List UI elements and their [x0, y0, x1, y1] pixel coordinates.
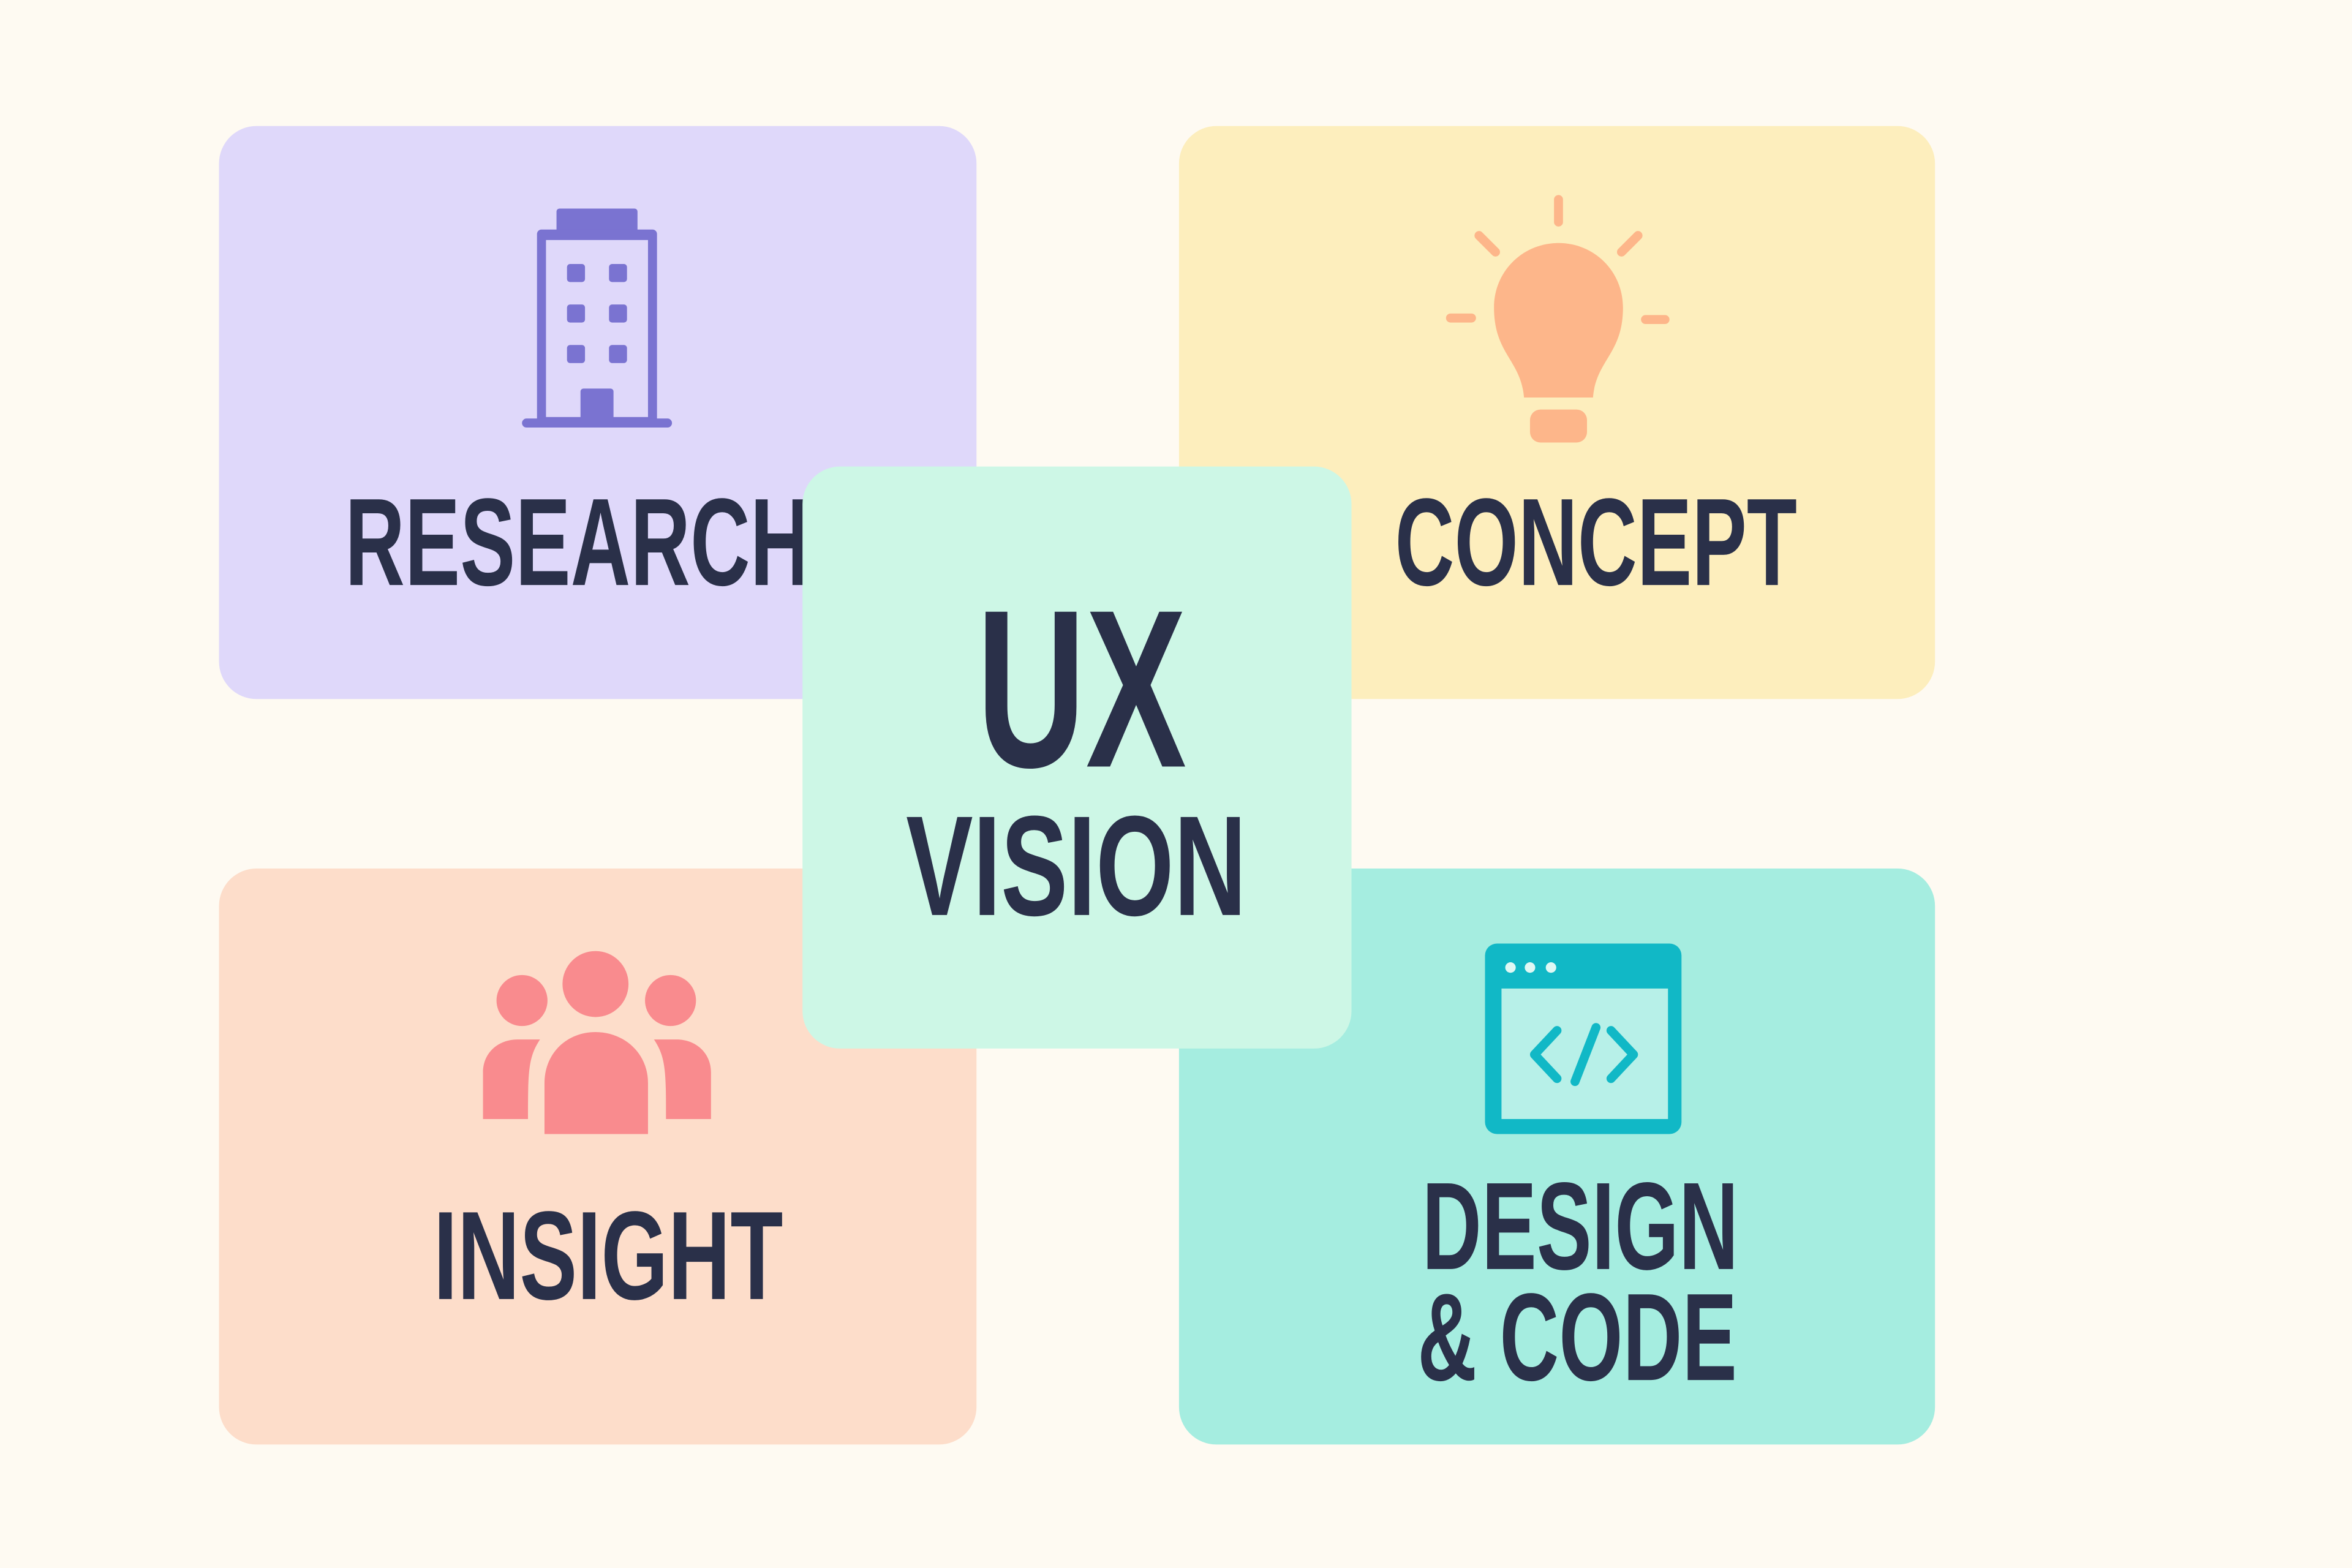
heading: design & code: DESIGN	[1422, 1157, 1738, 1296]
icon: browser code window	[1485, 943, 1681, 1134]
heading: ux: UX	[976, 562, 1187, 814]
heading: concept: CONCEPT	[1395, 473, 1797, 612]
icon: lightbulb	[1450, 200, 1665, 442]
heading: vision: VISION	[906, 786, 1246, 946]
panel: insight	[219, 869, 976, 1444]
icon: people	[483, 951, 711, 1134]
heading: design & code: & CODE	[1417, 1268, 1737, 1407]
icon: building	[522, 208, 672, 428]
panel: center ux vision	[802, 467, 1352, 1049]
heading: research: RESEARCH	[345, 473, 810, 612]
panel: design & code	[1179, 869, 1935, 1444]
panel: concept	[1179, 126, 1935, 699]
panel: research	[219, 126, 976, 699]
heading: insight: INSIGHT	[434, 1185, 783, 1326]
heading: design & code	[1417, 1157, 1738, 1407]
